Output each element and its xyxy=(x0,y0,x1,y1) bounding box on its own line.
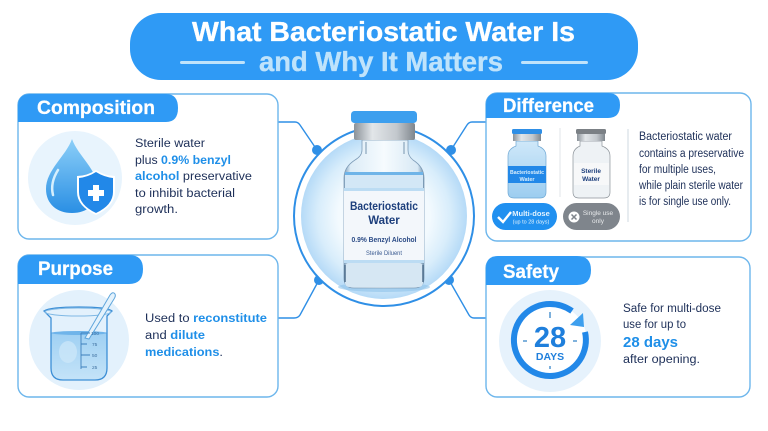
icon: water drop with shield xyxy=(28,131,122,225)
text: safety: Safe for multi-dose xyxy=(623,303,721,315)
heading: safety: Safety xyxy=(503,262,559,283)
title banner xyxy=(130,13,638,80)
icon: beaker with stirring rod: 75 xyxy=(92,342,98,348)
icon: bacteriostatic vial xyxy=(508,129,546,198)
text: safety: use for up to xyxy=(623,319,686,331)
vial label text: Sterile Diluent xyxy=(366,251,402,257)
heading: composition xyxy=(18,94,178,122)
text: purpose: and dilute xyxy=(145,330,205,342)
icon: beaker with stirring rod: 100 xyxy=(91,331,99,337)
heading: difference xyxy=(486,93,620,118)
badge: single use: only xyxy=(592,218,605,225)
text: purpose: Used to reconstitute xyxy=(145,313,267,325)
text: composition: to inhibit bacterial xyxy=(135,188,235,200)
panel: composition xyxy=(18,94,278,239)
icon: bacteriostatic vial: Bacteriostatic xyxy=(510,170,544,176)
text: composition: Sterile water xyxy=(135,138,205,150)
icon: bacteriostatic vial: Water xyxy=(519,177,535,183)
heading: purpose xyxy=(18,255,143,284)
vial label text: 0.9% Benzyl Alcohol xyxy=(352,235,416,244)
icon: sterile vial: Water xyxy=(582,176,600,183)
badge: multi-dose: (up to 28 days) xyxy=(513,220,550,226)
vial label text: Water xyxy=(368,215,400,227)
badge: single use xyxy=(563,203,620,230)
heading: purpose: Purpose xyxy=(38,259,113,280)
title banner: and Why It Matters xyxy=(259,46,503,77)
panel: difference xyxy=(486,93,751,241)
text: composition: plus 0.9% benzyl xyxy=(135,155,231,167)
text: difference: for multiple uses, xyxy=(639,164,716,176)
icon: beaker with stirring rod xyxy=(29,290,129,390)
icon: sterile vial: Sterile xyxy=(581,168,601,175)
panel: purpose xyxy=(18,255,278,397)
text: composition xyxy=(135,138,252,216)
icon: sterile vial xyxy=(573,129,610,198)
icon: 28 day clock: DAYS xyxy=(536,351,564,363)
central vial illustration xyxy=(294,111,474,306)
badge: single use: Single use xyxy=(583,210,614,217)
badge: multi-dose xyxy=(492,203,557,230)
heading: composition: Composition xyxy=(37,98,155,119)
text: purpose xyxy=(145,313,267,359)
heading: difference: Difference xyxy=(503,96,594,117)
text: composition: alcohol preservative xyxy=(135,171,252,183)
text: safety: 28 days xyxy=(623,334,678,351)
heading: safety xyxy=(486,256,591,285)
vial label text xyxy=(350,201,419,257)
title banner: What Bacteriostatic Water Is xyxy=(192,16,575,47)
connector lines to the central vial xyxy=(278,122,486,318)
text: difference: is for single use only. xyxy=(639,196,731,208)
text: safety xyxy=(623,303,721,366)
vial label text: Bacteriostatic xyxy=(350,201,419,213)
icon: beaker with stirring rod: 25 xyxy=(92,365,98,371)
text: safety: after opening. xyxy=(623,354,700,366)
text: purpose: medications . xyxy=(145,347,223,359)
text: difference: contains a preservative xyxy=(639,148,744,160)
text: composition: growth. xyxy=(135,204,178,216)
text: difference xyxy=(638,131,744,208)
text: difference: while plain sterile water xyxy=(638,180,743,192)
icon: 28 day clock xyxy=(499,290,601,392)
badge: multi-dose: Multi-dose xyxy=(512,209,550,218)
panel: safety xyxy=(486,256,750,397)
text: difference: Bacteriostatic water xyxy=(639,131,732,143)
icon: beaker with stirring rod: 50 xyxy=(92,353,98,359)
icon: 28 day clock: 28 xyxy=(534,322,566,354)
